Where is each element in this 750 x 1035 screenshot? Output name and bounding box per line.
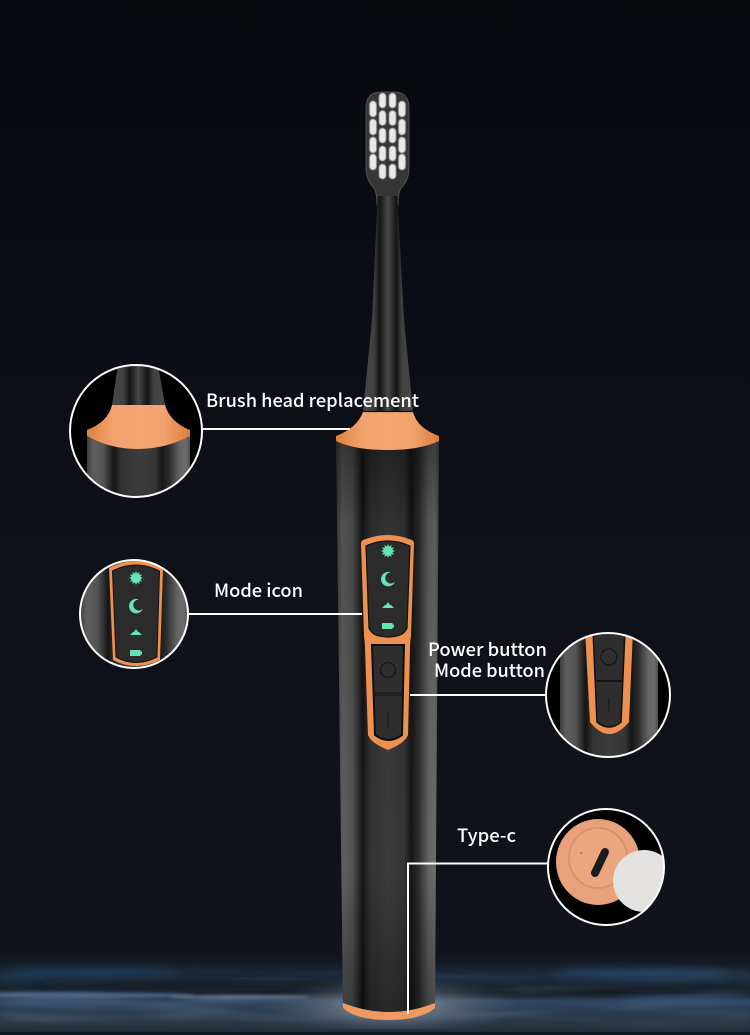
icon: battery — [382, 623, 394, 629]
label: mode icon: Mode icon — [214, 577, 303, 603]
label: power button: Power button — [428, 636, 547, 662]
leader lines — [188, 429, 548, 1014]
callout: type-c port — [548, 809, 675, 925]
brush neck — [363, 196, 413, 412]
icon: moon — [129, 599, 143, 613]
label: brush head replacement: Brush head replacement — [206, 387, 419, 413]
mode glow icons — [381, 544, 395, 629]
orange collar — [336, 412, 439, 450]
collar shadow line — [363, 410, 413, 412]
icon: sun — [381, 544, 395, 558]
base ring — [343, 1003, 435, 1020]
icon: battery — [130, 650, 142, 656]
callout: power and mode buttons — [546, 630, 670, 760]
bristles — [370, 93, 406, 179]
toothbrush — [336, 92, 439, 1020]
icon: mountain — [382, 602, 394, 608]
brush head — [366, 92, 409, 205]
icon: moon — [381, 572, 395, 586]
misty floor — [0, 960, 750, 1035]
label: type-c: Type-c — [457, 822, 516, 848]
button area — [372, 645, 404, 740]
icon: mountain — [130, 629, 142, 635]
mode icon panel — [366, 541, 410, 637]
label: mode button: Mode button — [434, 657, 545, 683]
icon: sun — [129, 571, 143, 585]
handle shading — [336, 437, 439, 1016]
mode panel trim — [361, 535, 414, 750]
handle body — [336, 437, 439, 1016]
callout: mode icons — [80, 558, 188, 670]
callout: brush head replacement — [70, 365, 202, 500]
